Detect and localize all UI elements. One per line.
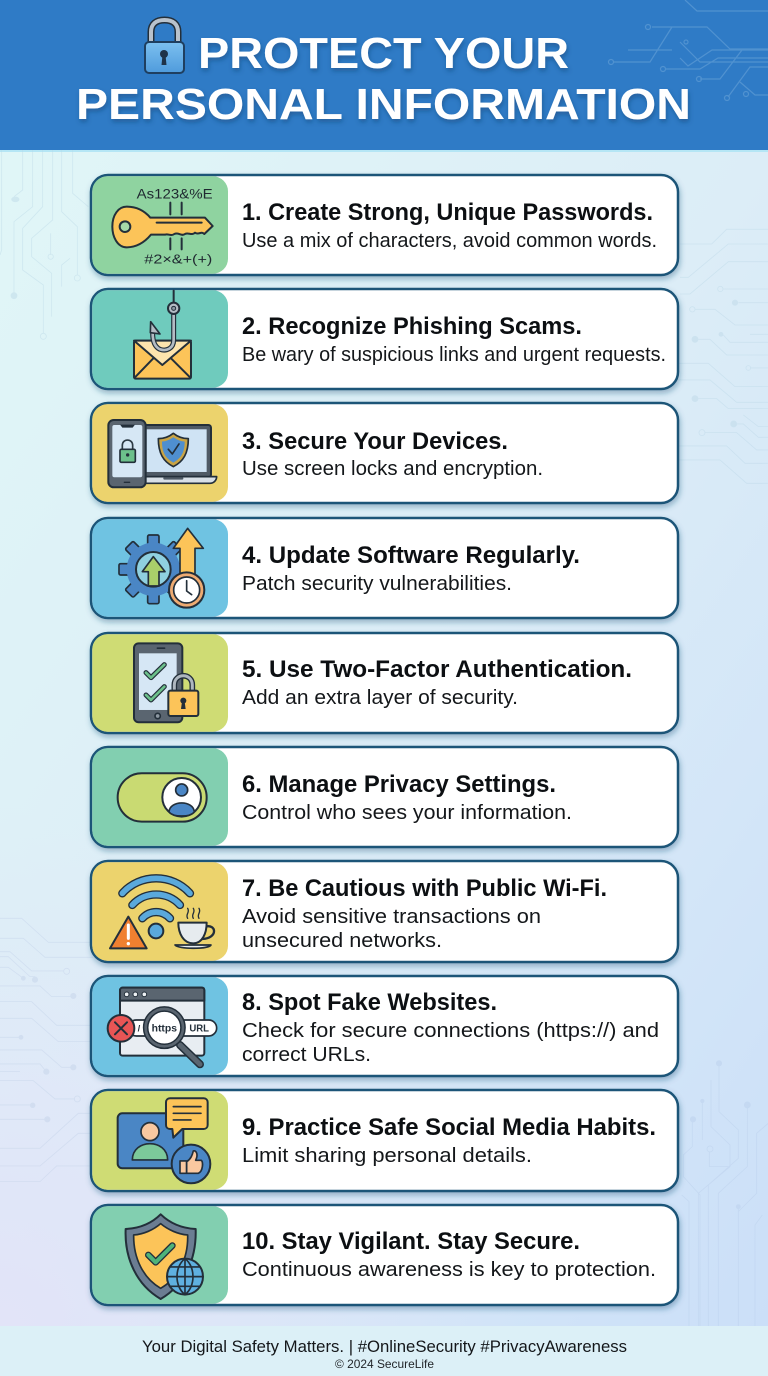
heading 9: 9. Practice Safe Social Media Habits. [242, 1114, 656, 1141]
description 7 [242, 906, 541, 952]
icon: hook in envelope [134, 291, 191, 379]
icon: privacy toggle with person [118, 773, 207, 822]
description 5: Add an extra layer of security. [242, 687, 518, 709]
footer tagline: Your Digital Safety Matters. | #OnlineSecurity #PrivacyAwareness [142, 1337, 627, 1356]
header banner [0, 0, 768, 152]
icon: laptop and phone with lock and shield [108, 420, 217, 487]
heading 5: 5. Use Two-Factor Authentication. [242, 656, 632, 683]
card 6: privacy settings [91, 747, 678, 847]
description 9: Limit sharing personal details. [242, 1145, 532, 1167]
heading 4: 4. Update Software Regularly. [242, 542, 580, 569]
description 8: correct URLs. [242, 1044, 371, 1066]
icon: browser, https magnifier and error: / [138, 1024, 141, 1034]
heading 1: 1. Create Strong, Unique Passwords. [242, 199, 653, 226]
icon: profile, chat bubble and thumbs up [118, 1098, 210, 1183]
icon: phone with checks and padlock [134, 643, 198, 722]
title [76, 29, 691, 129]
card 3: devices [91, 403, 678, 503]
card 4: updates [91, 518, 678, 618]
card 7: public wi-fi [91, 861, 678, 962]
icon: key with characters: #2×&+(+) [144, 251, 212, 266]
description 2: Be wary of suspicious links and urgent requests. [242, 344, 666, 366]
circuit pattern: upper left [0, 150, 88, 339]
card 1: passwords [91, 175, 678, 275]
heading 8: 8. Spot Fake Websites. [242, 989, 497, 1016]
icon: browser, https magnifier and error: URL [189, 1024, 209, 1035]
description 3: Use screen locks and encryption. [242, 458, 543, 480]
card 5: two-factor [91, 633, 678, 733]
description 1: Use a mix of characters, avoid common words. [242, 230, 657, 252]
heading 6: 6. Manage Privacy Settings. [242, 771, 556, 798]
circuit pattern: lower right [682, 1061, 768, 1330]
icon: browser, https magnifier and error: https [152, 1023, 177, 1034]
card 8: fake websites [91, 976, 678, 1076]
heading 2: 2. Recognize Phishing Scams. [242, 313, 582, 340]
heading 3: 3. Secure Your Devices. [242, 428, 508, 455]
description 4: Patch security vulnerabilities. [242, 573, 512, 595]
card 2: phishing [91, 289, 678, 389]
description 8: Check for secure connections (https://) and [242, 1020, 659, 1042]
circuit pattern: lower left [0, 918, 93, 1182]
description 8 [242, 1020, 659, 1066]
icon: key with characters [112, 187, 213, 266]
icon: browser, https magnifier and error [108, 988, 217, 1064]
circuit pattern: upper right [675, 229, 768, 483]
card 10: stay vigilant [91, 1205, 678, 1305]
footer band [0, 1326, 768, 1376]
title: PERSONAL INFORMATION [76, 80, 691, 129]
description 6: Control who sees your information. [242, 802, 572, 824]
heading 10: 10. Stay Vigilant. Stay Secure. [242, 1228, 580, 1255]
copyright: © 2024 SecureLife [335, 1357, 434, 1371]
description 7: Avoid sensitive transactions on [242, 906, 541, 928]
icon: gear, arrows and clock [119, 528, 204, 608]
description 7: unsecured networks. [242, 930, 442, 952]
card 9: social media [91, 1090, 678, 1191]
heading 7: 7. Be Cautious with Public Wi-Fi. [242, 875, 607, 902]
description 10: Continuous awareness is key to protection. [242, 1259, 656, 1281]
title: PROTECT YOUR [198, 29, 569, 78]
icon: padlock [145, 20, 184, 73]
icon: shield with check and globe [126, 1214, 203, 1299]
icon: key with characters: As123&%E [137, 187, 213, 202]
icon: wi-fi, warning and coffee [110, 878, 214, 948]
